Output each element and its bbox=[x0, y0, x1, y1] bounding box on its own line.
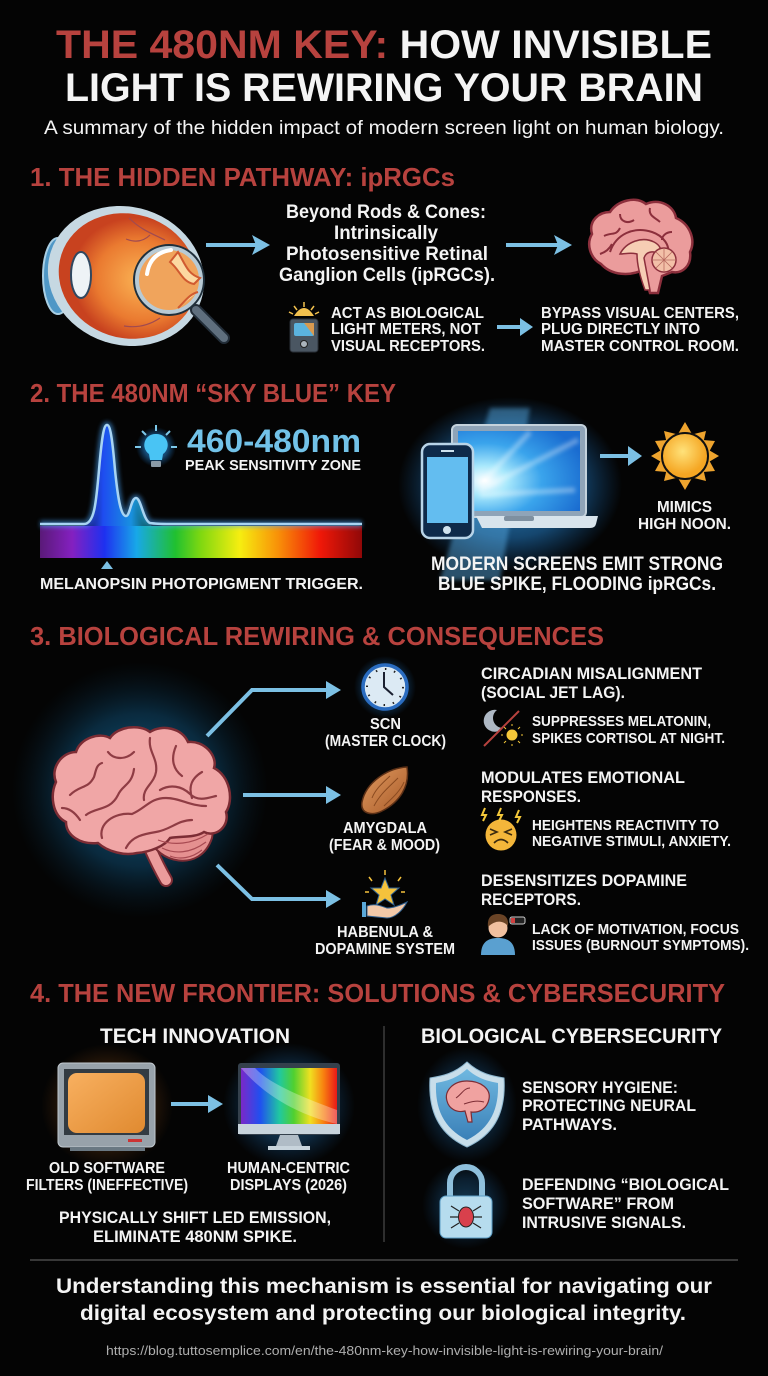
label: habenula: HABENULA & bbox=[337, 924, 433, 941]
label: amygdala: (FEAR & MOOD) bbox=[329, 837, 440, 854]
text: shift LED emission bbox=[59, 1208, 331, 1246]
title: THE 480NM KEY: HOW INVISIBLE bbox=[56, 23, 712, 67]
text: beyond rods and cones: Photosensitive Retinal bbox=[286, 244, 488, 265]
text: suppresses melatonin: SUPPRESSES MELATONIN, bbox=[532, 713, 711, 730]
arrow: meters to master control bbox=[497, 318, 533, 336]
icon: human-centric display bbox=[223, 1043, 355, 1167]
text: bypass visual centers: BYPASS VISUAL CENTERS, bbox=[541, 305, 739, 322]
subheading: biological cybersecurity: BIOLOGICAL CYBERSECURITY bbox=[421, 1025, 722, 1048]
footer statement: Understanding this mechanism is essential for navigating our bbox=[56, 1275, 712, 1298]
icon: old CRT monitor bbox=[41, 1044, 173, 1168]
label: old software filters bbox=[26, 1160, 188, 1194]
text: circadian misalignment bbox=[481, 664, 703, 702]
text: biological light meters: VISUAL RECEPTORS. bbox=[331, 338, 485, 355]
text: bypass visual centers: MASTER CONTROL ROOM. bbox=[541, 338, 739, 355]
text: circadian misalignment: CIRCADIAN MISALIGNMENT bbox=[481, 664, 703, 683]
label: peak wavelength bbox=[185, 423, 361, 474]
text: defending biological software: DEFENDING “BIOLOGICAL bbox=[522, 1175, 729, 1194]
icon: sagittal brain bbox=[589, 200, 692, 293]
text: biological light meters: ACT AS BIOLOGICAL bbox=[331, 305, 484, 322]
arrow: text to brain bbox=[506, 235, 572, 255]
label: amygdala bbox=[329, 820, 440, 854]
text: defending biological software: INTRUSIVE SIGNALS. bbox=[522, 1213, 686, 1232]
text: sensory hygiene: PROTECTING NEURAL bbox=[522, 1096, 696, 1115]
icon: almond bbox=[362, 767, 408, 814]
text: mimics high noon bbox=[638, 499, 731, 533]
icon: hand with star bbox=[362, 870, 407, 918]
footer statement: digital ecosystem and protecting our biological integrity. bbox=[80, 1302, 686, 1325]
label: habenula: DOPAMINE SYSTEM bbox=[315, 941, 455, 958]
text: modern screens: MODERN SCREENS EMIT STRONG bbox=[431, 554, 723, 575]
panel: section 1 hidden pathway bbox=[30, 162, 739, 366]
text: modulates emotional: RESPONSES. bbox=[481, 787, 581, 806]
text: modulates emotional: MODULATES EMOTIONAL bbox=[481, 768, 685, 787]
text: shift LED emission: ELIMINATE 480NM SPIKE. bbox=[93, 1227, 297, 1246]
panel: section 4 new frontier bbox=[26, 978, 729, 1249]
text: beyond rods and cones: Intrinsically bbox=[334, 223, 438, 244]
label: human-centric displays: HUMAN-CENTRIC bbox=[227, 1160, 350, 1177]
arrow: to habenula bbox=[217, 865, 341, 908]
label: amygdala: AMYGDALA bbox=[343, 820, 427, 837]
caption: melanopsin: MELANOPSIN PHOTOPIGMENT TRIGGER. bbox=[40, 576, 363, 593]
text: heightens reactivity: HEIGHTENS REACTIVITY TO bbox=[532, 817, 719, 834]
text: modern screens bbox=[431, 554, 723, 595]
heading: section 3: 3. BIOLOGICAL REWIRING & CONSEQUENCES bbox=[30, 621, 604, 651]
text: mimics high noon: HIGH NOON. bbox=[638, 516, 731, 533]
source url: https://blog.tuttosemplice.com/en/the-480nm-key-how-invisible-light-is-rewiring-your-brain/ bbox=[106, 1343, 663, 1358]
text: biological light meters: LIGHT METERS, NOT bbox=[331, 321, 481, 338]
icon: tired person bbox=[481, 914, 525, 955]
text: beyond rods and cones: Ganglion Cells (ipRGCs). bbox=[279, 265, 495, 286]
text: bypass visual centers bbox=[541, 305, 739, 355]
label: SCN: SCN bbox=[370, 716, 401, 733]
icon: padlock with bug bbox=[422, 1161, 510, 1249]
arrow: to amygdala bbox=[243, 786, 341, 804]
text: circadian misalignment: (SOCIAL JET LAG). bbox=[481, 683, 625, 702]
heading: section 2: 2. THE 480NM “SKY BLUE” KEY bbox=[30, 378, 396, 408]
text: desensitizes dopamine: DESENSITIZES DOPAMINE bbox=[481, 871, 687, 890]
text: desensitizes dopamine bbox=[481, 871, 687, 909]
title: LIGHT IS REWIRING YOUR BRAIN bbox=[65, 66, 703, 110]
text: lack of motivation: ISSUES (BURNOUT SYMPTOMS). bbox=[532, 937, 749, 954]
text: shift LED emission: PHYSICALLY SHIFT LED EMISSION, bbox=[59, 1208, 331, 1227]
subtitle: A summary of the hidden impact of modern screen light on human biology. bbox=[44, 118, 724, 139]
panel: section 2 sky blue key bbox=[30, 378, 731, 595]
label: SCN bbox=[325, 716, 446, 750]
text: lack of motivation bbox=[532, 921, 749, 954]
text: desensitizes dopamine: RECEPTORS. bbox=[481, 890, 581, 909]
footer statement bbox=[56, 1275, 712, 1325]
chart: melanopsin spectrum bbox=[40, 425, 363, 593]
label: peak wavelength: PEAK SENSITIVITY ZONE bbox=[185, 457, 361, 474]
text: bypass visual centers: PLUG DIRECTLY INTO bbox=[541, 321, 700, 338]
icon: light meter bbox=[289, 302, 319, 352]
label: old software filters: FILTERS (INEFFECTIVE) bbox=[26, 1177, 188, 1194]
text: heightens reactivity: NEGATIVE STIMULI, ANXIETY. bbox=[532, 833, 731, 850]
text: defending biological software bbox=[522, 1175, 729, 1232]
text: heightens reactivity bbox=[532, 817, 731, 850]
text: sensory hygiene: PATHWAYS. bbox=[522, 1115, 617, 1134]
text: modulates emotional bbox=[481, 768, 685, 806]
icon: shield with brain bbox=[417, 1047, 517, 1163]
label: old software filters: OLD SOFTWARE bbox=[49, 1160, 165, 1177]
text: sensory hygiene: SENSORY HYGIENE: bbox=[522, 1078, 678, 1097]
icon: light bulb bbox=[135, 425, 177, 467]
text: beyond rods and cones: Beyond Rods & Cones: bbox=[286, 202, 486, 223]
text: sensory hygiene bbox=[522, 1078, 696, 1134]
text: mimics high noon: MIMICS bbox=[657, 499, 712, 516]
panel: section 3 biological rewiring bbox=[12, 621, 749, 958]
arrow: old to new display bbox=[171, 1095, 223, 1113]
icon: stressed face bbox=[482, 808, 520, 850]
label: human-centric displays: DISPLAYS (2026) bbox=[230, 1177, 347, 1194]
arrow: to SCN bbox=[207, 681, 341, 736]
icon: sun bbox=[651, 422, 719, 490]
text: suppresses melatonin: SPIKES CORTISOL AT NIGHT. bbox=[532, 730, 725, 747]
label: SCN: (MASTER CLOCK) bbox=[325, 733, 446, 750]
icon: clock bbox=[354, 656, 416, 718]
icon: phone and laptop glowing bbox=[398, 397, 622, 580]
text: modern screens: BLUE SPIKE, FLOODING ipRGCs. bbox=[438, 574, 716, 595]
text: biological light meters bbox=[331, 305, 485, 355]
label: human-centric displays bbox=[227, 1160, 350, 1194]
label: habenula bbox=[315, 924, 455, 958]
heading: section 1: 1. THE HIDDEN PATHWAY: ipRGCs bbox=[30, 162, 455, 192]
title bbox=[56, 23, 712, 110]
arrow: screens to sun bbox=[600, 446, 642, 466]
heading: section 4: 4. THE NEW FRONTIER: SOLUTIONS & CYBERSECURITY bbox=[30, 978, 725, 1008]
icon: large brain bbox=[12, 662, 268, 918]
text: lack of motivation: LACK OF MOTIVATION, FOCUS bbox=[532, 921, 739, 938]
text: suppresses melatonin bbox=[532, 713, 725, 747]
text: defending biological software: SOFTWARE” FROM bbox=[522, 1194, 674, 1213]
arrow: eye to text bbox=[206, 235, 270, 255]
text: beyond rods and cones bbox=[279, 202, 495, 286]
label: peak wavelength: 460-480nm bbox=[187, 423, 361, 459]
icon: moon and sun crossed bbox=[484, 710, 523, 746]
icon: eye with magnifying glass bbox=[30, 186, 224, 366]
subheading: tech innovation: TECH INNOVATION bbox=[100, 1025, 290, 1048]
